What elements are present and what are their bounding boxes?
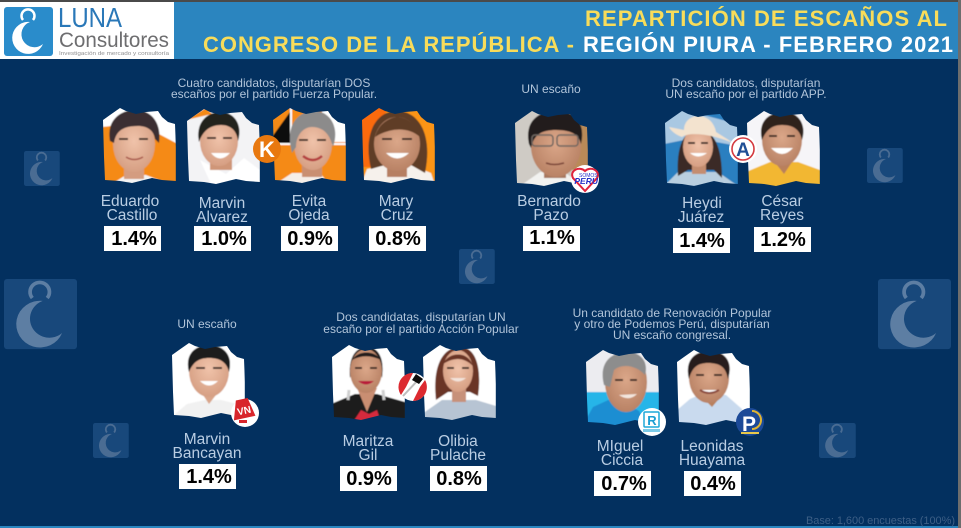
name: Heydi Juárez: Juárez <box>678 209 724 226</box>
heading: APP: Dos candidatos, disputarían <box>672 76 820 90</box>
title: CONGRESO DE LA REPÚBLICA - <box>203 32 574 57</box>
name: Evita Ojeda: Evita <box>292 193 327 210</box>
name: Marvin Alvarez: Alvarez <box>196 209 248 226</box>
heading: Fuerza Popular: Cuatro candidatos, disputarían DOS <box>178 76 370 90</box>
icon: Renovación Popular <box>638 408 666 436</box>
name: Leonidas Huayama: Huayama <box>679 452 746 469</box>
icon: Acción Popular <box>398 373 427 401</box>
value: César Reyes: 1.2% <box>760 229 806 251</box>
panel: Marvin Bancayan <box>171 317 259 489</box>
value: Miguel Ciccia: 0.7% <box>601 473 647 495</box>
portrait: Olibia Pulache <box>422 344 496 422</box>
name: Mary Cruz: Mary <box>379 193 413 210</box>
value: Marvin Alvarez: 1.0% <box>201 228 247 250</box>
icon: APP A <box>729 135 757 163</box>
heading: APP: UN escaño por el partido APP. <box>665 87 827 101</box>
header band <box>174 2 958 59</box>
portrait: César Reyes <box>746 110 820 188</box>
heading: Acción Popular: escaño por el partido Acción Popular <box>323 322 519 336</box>
name: Mary Cruz: Cruz <box>381 207 413 224</box>
title: REGIÓN PIURA - FEBRERO 2021 <box>583 32 953 57</box>
heading: Acción Popular: Dos candidatas, disputarían UN <box>336 310 506 324</box>
icon: Victoria Nacional <box>230 397 259 427</box>
heading: Fuerza Popular: escaños por el partido Fuerza Popular. <box>171 87 377 101</box>
name: César Reyes: César <box>761 193 803 210</box>
panel: Fuerza Popular <box>101 76 435 251</box>
logo: Luna Consultores: Investigación de mercado y consultoría <box>59 51 169 57</box>
logo: Luna Consultores <box>0 2 174 59</box>
icon: Podemos Perú: P <box>742 413 756 436</box>
value: Heydi Juárez: 1.4% <box>679 230 725 252</box>
portrait: Bernardo Pazo <box>514 110 588 188</box>
icon: Fuerza Popular K: K <box>259 137 275 162</box>
portrait: Eduardo Castillo <box>102 107 176 185</box>
portrait: Evita Ojeda <box>272 107 346 185</box>
name: Marvin Alvarez: Marvin <box>199 195 245 212</box>
name: Maritza Gil: Maritza <box>343 433 394 450</box>
icon: Somos Perú: SOMOS <box>579 173 598 179</box>
portrait: Leonidas Huayama <box>676 349 750 427</box>
name: Heydi Juárez: Heydi <box>682 195 722 212</box>
value: Marvin Bancayan: 1.4% <box>186 466 232 488</box>
watermark logos <box>4 148 951 458</box>
value: Olibia Pulache: 0.8% <box>436 468 482 490</box>
portrait: Marvin Bancayan <box>171 342 245 420</box>
name: Evita Ojeda: Ojeda <box>288 207 330 224</box>
footnote: base: Base: 1,600 encuestas (100%) <box>806 515 955 527</box>
panel: Bernardo Pazo <box>514 82 599 251</box>
name: Bernardo Pazo: Pazo <box>533 207 569 224</box>
icon: Somos Perú <box>571 165 599 193</box>
portrait: Mary Cruz <box>361 107 435 185</box>
portrait: Marvin Alvarez <box>186 108 260 186</box>
name: Olibia Pulache: Pulache <box>430 447 486 464</box>
heading: Renovación y Podemos: y otro de Podemos Perú, disputarían <box>574 317 770 331</box>
name: Eduardo Castillo: Castillo <box>107 207 157 224</box>
name: Olibia Pulache: Olibia <box>438 433 478 450</box>
heading: UN escaño: UN escaño <box>177 317 237 331</box>
panel: Renovación Popular y Podemos Perú <box>573 306 771 496</box>
name: Maritza Gil: Gil <box>359 447 377 464</box>
icon: Somos Perú: PERU <box>574 176 599 186</box>
portrait: Maritza Gil <box>331 344 405 422</box>
value: Evita Ojeda: 0.9% <box>287 228 333 250</box>
title <box>203 6 953 57</box>
portrait: Heydi Juárez <box>664 110 738 188</box>
icon: Fuerza Popular K <box>253 135 281 163</box>
name: Miguel Ciccia: Ciccia <box>601 452 643 469</box>
name: Leonidas Huayama: Leonidas <box>681 438 744 455</box>
heading: Renovación y Podemos: Un candidato de Renovación Popular <box>573 306 771 320</box>
value: Bernardo Pazo: 1.1% <box>529 227 575 249</box>
name: Miguel Ciccia: MIguel <box>597 438 643 455</box>
value: Leonidas Huayama: 0.4% <box>690 473 736 495</box>
portrait: Miguel Ciccia <box>585 349 659 427</box>
panel: Acción Popular <box>323 310 519 491</box>
name: César Reyes: Reyes <box>760 207 804 224</box>
logo: Luna Consultores: LUNA <box>58 2 122 33</box>
value: Eduardo Castillo: 1.4% <box>111 228 157 250</box>
value: Mary Cruz: 0.8% <box>375 228 421 250</box>
name: Marvin Bancayan: Bancayan <box>173 445 241 462</box>
icon: Victoria Nacional: VN <box>236 405 252 418</box>
icon: Podemos Perú <box>736 408 764 436</box>
name: Marvin Bancayan: Marvin <box>184 431 230 448</box>
heading: UN escaño: UN escaño <box>521 82 581 96</box>
title: REPARTICIÓN DE ESCAÑOS AL <box>585 6 947 31</box>
logo: Luna Consultores: Consultores <box>59 29 169 52</box>
heading: Renovación y Podemos: UN escaño congresal. <box>613 328 731 342</box>
icon: APP A: A <box>736 140 750 161</box>
name: Eduardo Castillo: Eduardo <box>101 193 159 210</box>
name: Bernardo Pazo: Bernardo <box>517 193 581 210</box>
panel: APP <box>664 76 827 253</box>
icon: Renovación Popular: R <box>647 413 657 428</box>
value: Maritza Gil: 0.9% <box>346 468 392 490</box>
